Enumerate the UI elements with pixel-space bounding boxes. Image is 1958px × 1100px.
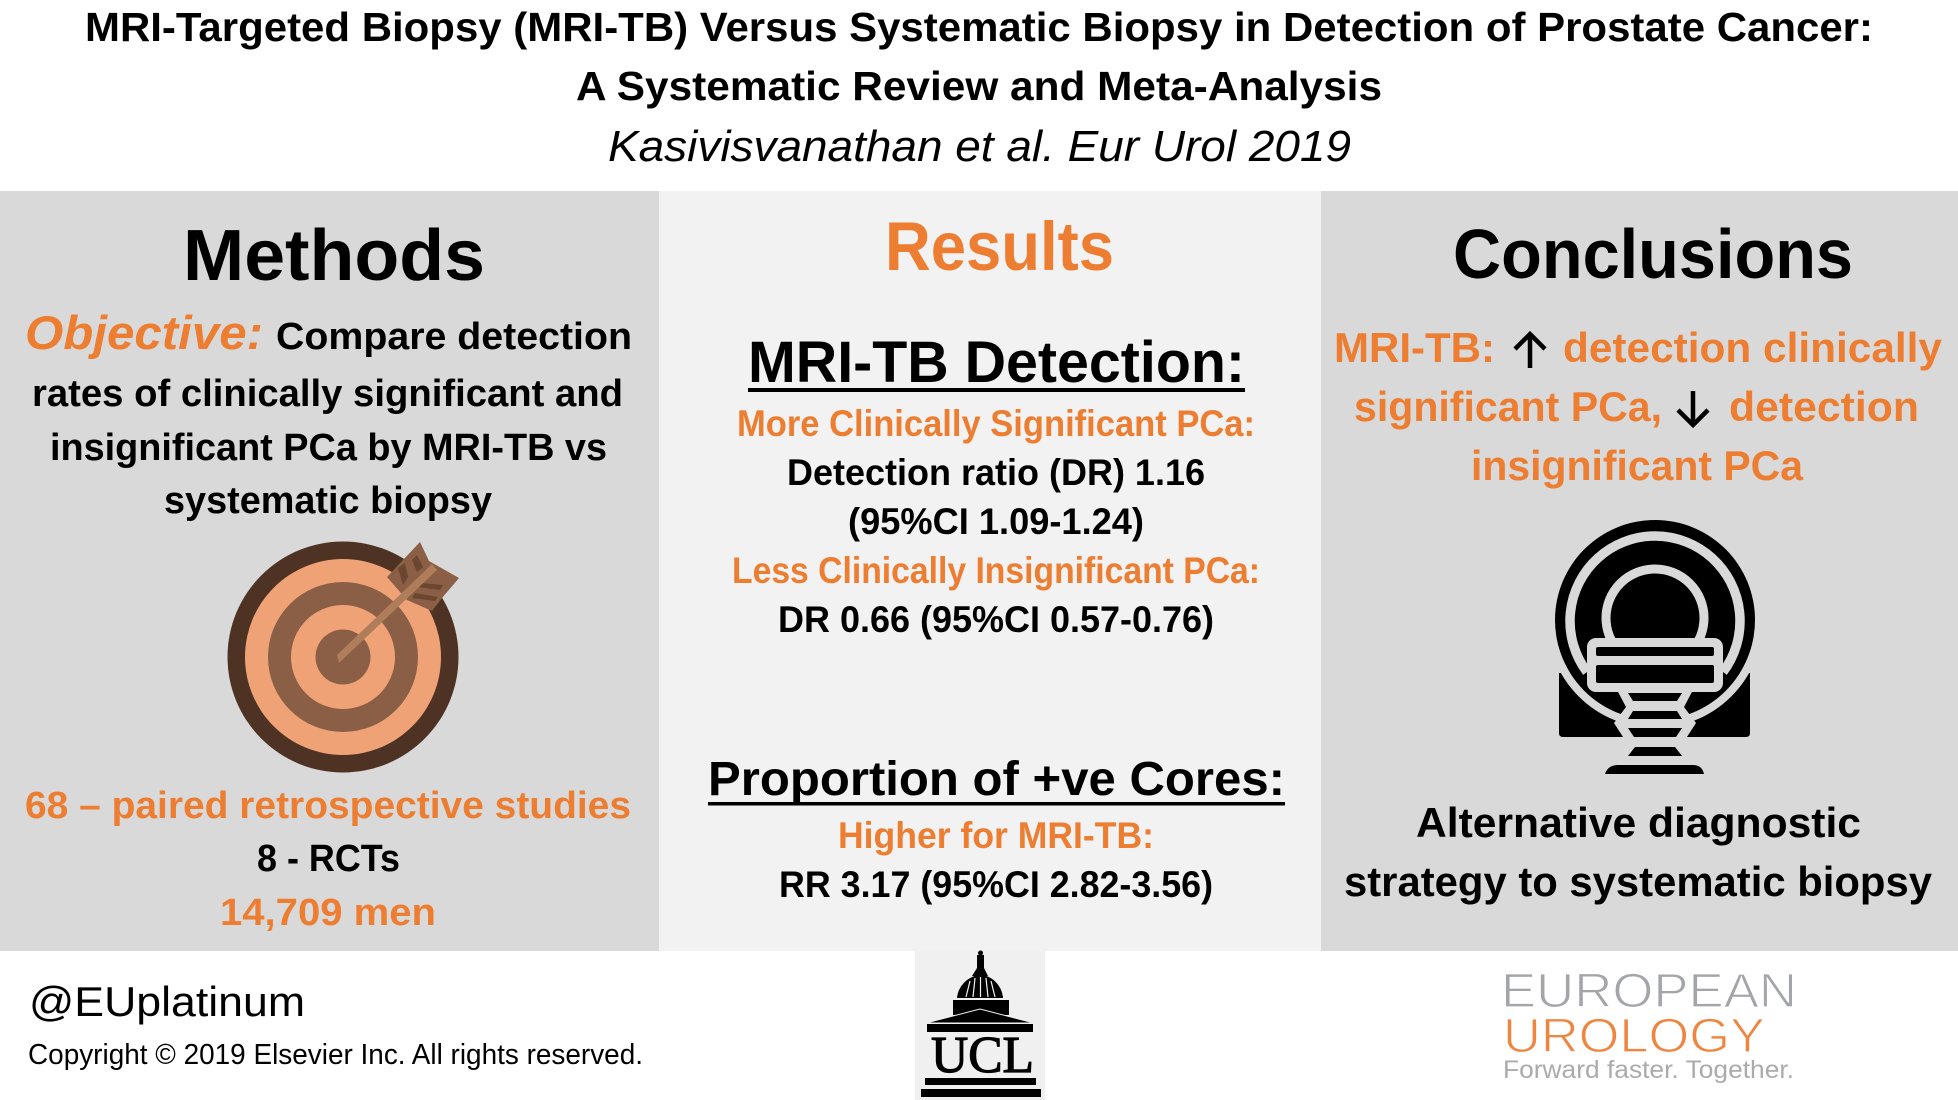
icon: up arrow [1515,334,1545,368]
objective line 2: rates of clinically significant and [32,373,623,415]
footer: handle and copyright [28,978,643,1071]
study counts [25,785,631,934]
title line 2: A Systematic Review and Meta-Analysis [576,63,1382,109]
summary line 2: strategy to systematic biopsy [1344,858,1933,905]
results heading: Results [885,208,1114,285]
logo: European Urology [1501,965,1797,1084]
less insignificant label: Less Clinically Insignificant PCa: [732,550,1260,591]
wordmark Urology: UROLOGY [1503,1010,1765,1063]
icon: down arrow [1678,391,1708,425]
title block [85,4,1873,171]
conclusion line 1 end: detection clinically [1563,324,1943,371]
conclusion line 2 end: detection [1729,383,1919,430]
icon: MRI scanner [1551,516,1759,774]
conclusion line 2 start: significant PCa, [1354,383,1662,430]
panel: methods [0,191,659,951]
men: 14,709 men [220,892,436,934]
conclusion summary [1344,799,1933,905]
MRI-TB detection section [732,330,1260,640]
RCTs: 8 - RCTs [257,838,400,880]
UCL wordmark: UCL [931,1027,1034,1084]
objective line 3: insignificant PCa by MRI-TB vs [50,427,607,469]
DR 0.66: DR 0.66 (95%CI 0.57-0.76) [778,599,1214,640]
proportion of positive cores section [708,753,1285,905]
logo: UCL [915,950,1045,1100]
MRI-TB detection heading: MRI-TB Detection: [748,330,1245,395]
title line 1: MRI-Targeted Biopsy (MRI-TB) Versus Systematic Biopsy in Detection of Prostate Cancer: [85,4,1873,50]
conclusion line 3: insignificant PCa [1471,442,1804,489]
relative risk: RR 3.17 (95%CI 2.82-3.56) [779,864,1213,905]
more significant label: More Clinically Significant PCa: [737,403,1255,444]
social handle: @EUplatinum [29,978,305,1025]
heading underline [748,388,1245,392]
conclusion line 1 start: MRI-TB: [1334,324,1495,371]
proportion heading: Proportion of +ve Cores: [708,753,1285,806]
higher label: Higher for MRI-TB: [838,815,1154,856]
proportion underline [708,802,1285,806]
conclusion statement [1334,324,1943,489]
summary line 1: Alternative diagnostic [1416,799,1861,846]
methods heading: Methods [183,216,485,296]
confidence interval: (95%CI 1.09-1.24) [848,501,1144,542]
icon: target with arrow [228,542,459,772]
wordmark European: EUROPEAN [1501,965,1797,1018]
tagline: Forward faster. Together. [1503,1056,1794,1084]
objective line 1: Compare detection [276,316,632,358]
panel: results [659,191,1321,951]
conclusions heading: Conclusions [1453,215,1853,293]
copyright: Copyright © 2019 Elsevier Inc. All rights reserved. [28,1039,643,1071]
paired studies: 68 – paired retrospective studies [25,785,631,827]
objective label: Objective: [25,306,263,359]
objective line 4: systematic biopsy [164,480,492,522]
objective text [25,306,632,522]
citation: Kasivisvanathan et al. Eur Urol 2019 [608,122,1351,171]
panel: conclusions [1321,191,1958,951]
detection ratio: Detection ratio (DR) 1.16 [787,452,1205,493]
